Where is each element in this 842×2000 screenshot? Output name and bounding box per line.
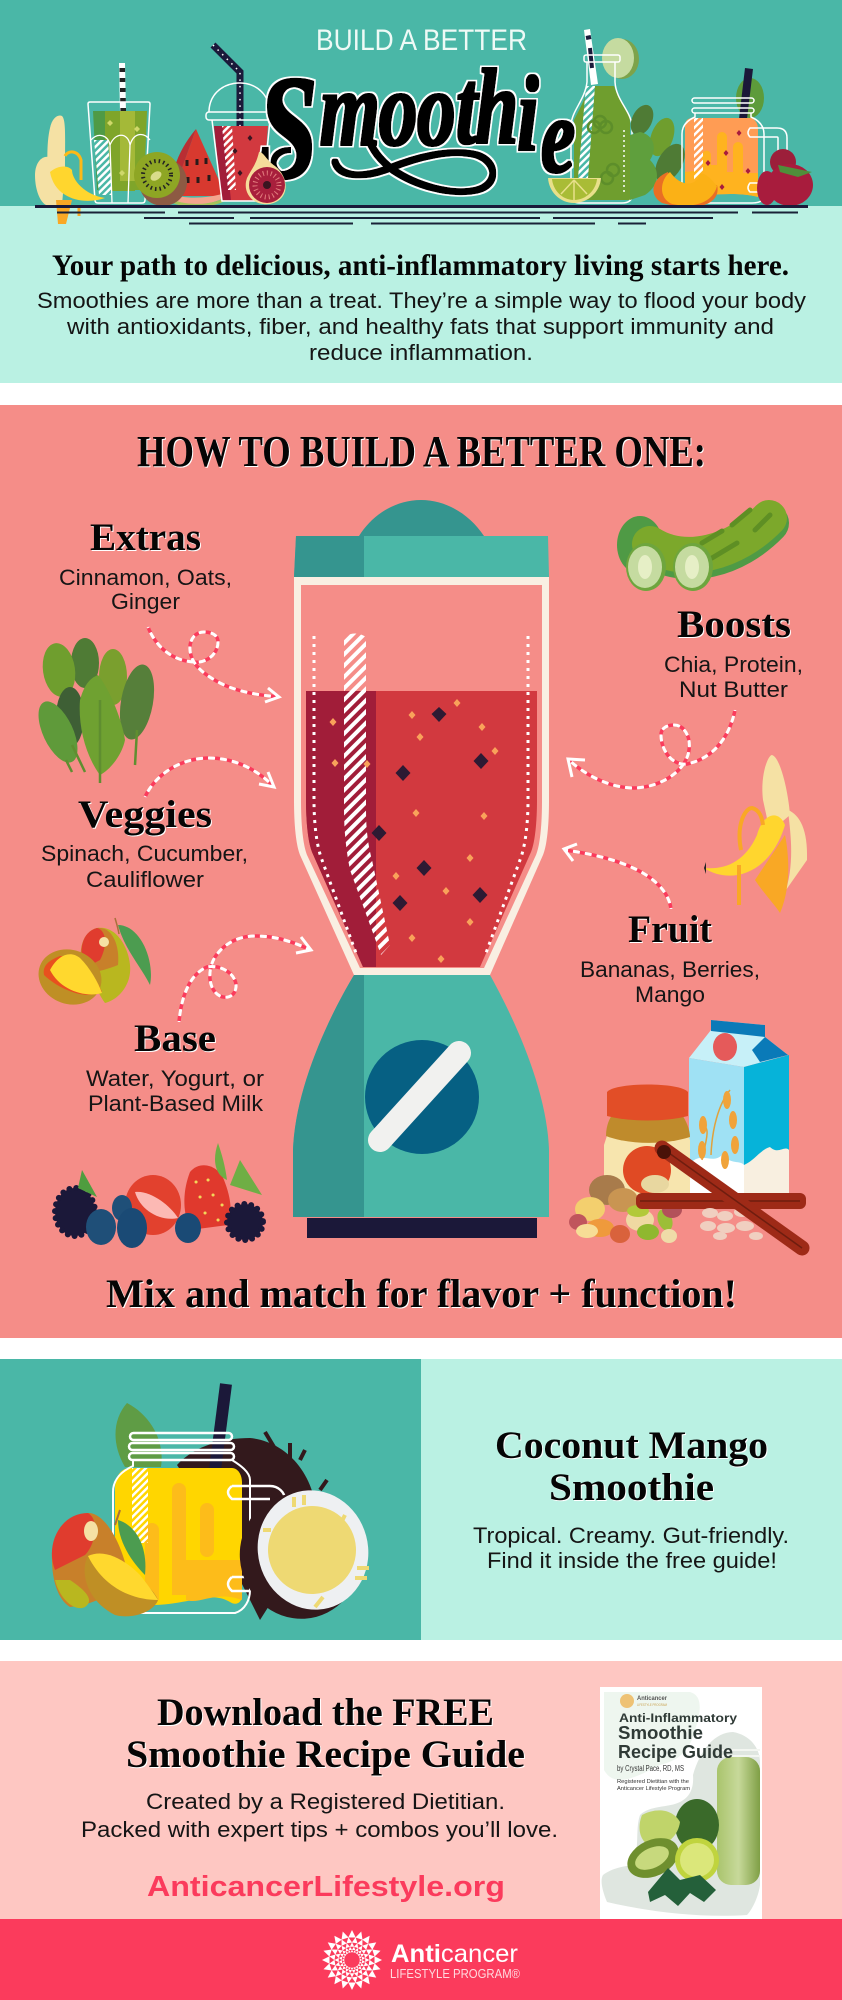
arrow: boosts [568, 710, 735, 788]
intro body [37, 288, 806, 365]
intro body: Smoothies are more than a treat. They’re a simple way to flood your body [37, 288, 806, 313]
blender base [293, 975, 549, 1238]
icon: nut butter jar [604, 1084, 690, 1205]
icon: mango [31, 918, 151, 1013]
counter lines [35, 205, 808, 224]
book cover: Anti-Inflammatory [619, 1711, 737, 1725]
intro heading: Your path to delicious, anti-inflammatory living starts here. [52, 249, 789, 282]
icon: berries [55, 1143, 263, 1248]
download heading: Download the FREE [157, 1691, 494, 1734]
book cover [600, 1687, 762, 1919]
intro body: reduce inflammation. [309, 340, 533, 365]
book cover: Recipe Guide [618, 1742, 733, 1762]
ingredient: veggies: Spinach, Cucumber, [41, 841, 248, 866]
icon: coconut half [226, 1478, 382, 1632]
icon: lime wedge [548, 178, 601, 203]
book cover: LIFESTYLE PROGRAM [637, 1703, 667, 1707]
icon: spinach [30, 638, 159, 783]
ingredient: extras: Ginger [111, 589, 180, 614]
book cover: Anticancer [637, 1695, 667, 1702]
ingredient: extras [59, 516, 232, 614]
blender lid [294, 500, 549, 577]
wordmark: Anticancer [391, 1940, 518, 1968]
download body [81, 1789, 558, 1842]
download body: Created by a Registered Dietitian. [146, 1789, 505, 1814]
panel: coconut mango illustration [52, 1384, 382, 1632]
lettering: Smoothie: h [475, 48, 518, 167]
section heading: HOW TO BUILD A BETTER ONE: [137, 427, 706, 476]
lettering: Smoothie [258, 46, 575, 211]
icon: spinach leaves [626, 101, 691, 200]
blender [293, 500, 549, 1238]
download heading: Smoothie Recipe Guide [126, 1733, 525, 1776]
panel: download [81, 1687, 762, 1919]
icon: mango [52, 1510, 158, 1616]
arrow: veggies [145, 758, 274, 797]
book cover: Registered Dietitian with the [617, 1779, 689, 1785]
blender jar [294, 577, 549, 975]
ingredient: fruit: Mango [635, 982, 705, 1007]
icon: watermelon [168, 129, 228, 205]
panel: how to build [30, 427, 807, 1316]
icon: coconut back [177, 1432, 327, 1620]
icon: green glass [88, 63, 150, 203]
closing line: Mix and match for flavor + function! [106, 1271, 737, 1316]
intro body: with antioxidants, fiber, and healthy fats that support immunity and [66, 314, 774, 339]
lettering: Smoothie: S [258, 46, 318, 211]
ingredient: fruit: Fruit [628, 908, 712, 951]
ingredient: boosts: Nut Butter [679, 677, 788, 702]
icon: kiwi [134, 152, 187, 206]
recipe description: Tropical. Creamy. Gut-friendly. [473, 1523, 789, 1548]
ingredient: fruit: Bananas, Berries, [580, 957, 760, 982]
icon: green bottle [571, 29, 639, 203]
book cover: Anticancer Lifestyle Program [617, 1786, 690, 1792]
website link: AnticancerLifestyle.org [147, 1871, 505, 1903]
icon: leaf [115, 1403, 162, 1467]
ingredient: extras: Cinnamon, Oats, [59, 565, 232, 590]
ingredient: veggies [41, 793, 248, 892]
arrow: base [179, 936, 311, 1022]
ingredient: extras: Extras [90, 516, 201, 559]
lettering: Smoothie: t [456, 48, 480, 167]
icon: banana left [35, 116, 105, 224]
icon: nuts and seeds [569, 1175, 682, 1243]
lettering: Smoothie: e [541, 77, 575, 196]
book cover: Smoothie [618, 1723, 703, 1743]
download heading [126, 1691, 525, 1776]
icon: cucumber [617, 510, 770, 591]
eyebrow title: BUILD A BETTER [316, 24, 527, 57]
ingredient: base: Plant-Based Milk [88, 1091, 264, 1116]
ingredient: boosts: Chia, Protein, [664, 652, 803, 677]
ingredient: boosts: Boosts [677, 603, 791, 646]
icon: cinnamon sticks [636, 1145, 806, 1248]
panel: footer logo [322, 1930, 520, 1990]
recipe title: Coconut Mango [495, 1424, 768, 1467]
arrow: fruit [564, 844, 671, 909]
recipe description: Find it inside the free guide! [487, 1548, 777, 1573]
icon: red cup [206, 45, 272, 201]
recipe description [473, 1523, 789, 1573]
icon: sunburst [322, 1930, 382, 1990]
icon: mason jar yellow [113, 1433, 285, 1613]
recipe title: Smoothie [549, 1466, 714, 1509]
lettering: Smoothie: o [379, 50, 418, 169]
icon: peach slice [653, 172, 718, 206]
recipe title [495, 1424, 768, 1509]
panel: intro [37, 249, 806, 365]
panel: coconut mango text [473, 1424, 789, 1573]
tagline: LIFESTYLE PROGRAM® [390, 1966, 520, 1981]
ingredient: veggies: Veggies [78, 793, 212, 836]
ingredient: base: Base [134, 1017, 216, 1060]
ingredient: base: Water, Yogurt, or [86, 1066, 264, 1091]
lettering: Smoothie: o [417, 50, 456, 169]
icon: mason jar orange [682, 68, 787, 203]
arrow: extras [148, 627, 279, 702]
ingredient: fruit [580, 908, 760, 1007]
icon: banana [704, 755, 807, 913]
panel: header [35, 24, 813, 224]
icon: straw [215, 1384, 226, 1470]
icon: fig [246, 152, 286, 204]
icon: raspberries [757, 149, 813, 206]
book cover: by Crystal Pace, RD, MS [617, 1764, 684, 1773]
ingredient: boosts [664, 603, 803, 702]
ingredient: base [86, 1017, 264, 1116]
download body: Packed with expert tips + combos you’ll love. [81, 1817, 558, 1842]
icon: milk carton [689, 1020, 789, 1193]
lettering: Smoothie: m [320, 50, 380, 169]
ingredient: veggies: Cauliflower [86, 867, 204, 892]
lettering: Smoothie: i [517, 55, 539, 174]
